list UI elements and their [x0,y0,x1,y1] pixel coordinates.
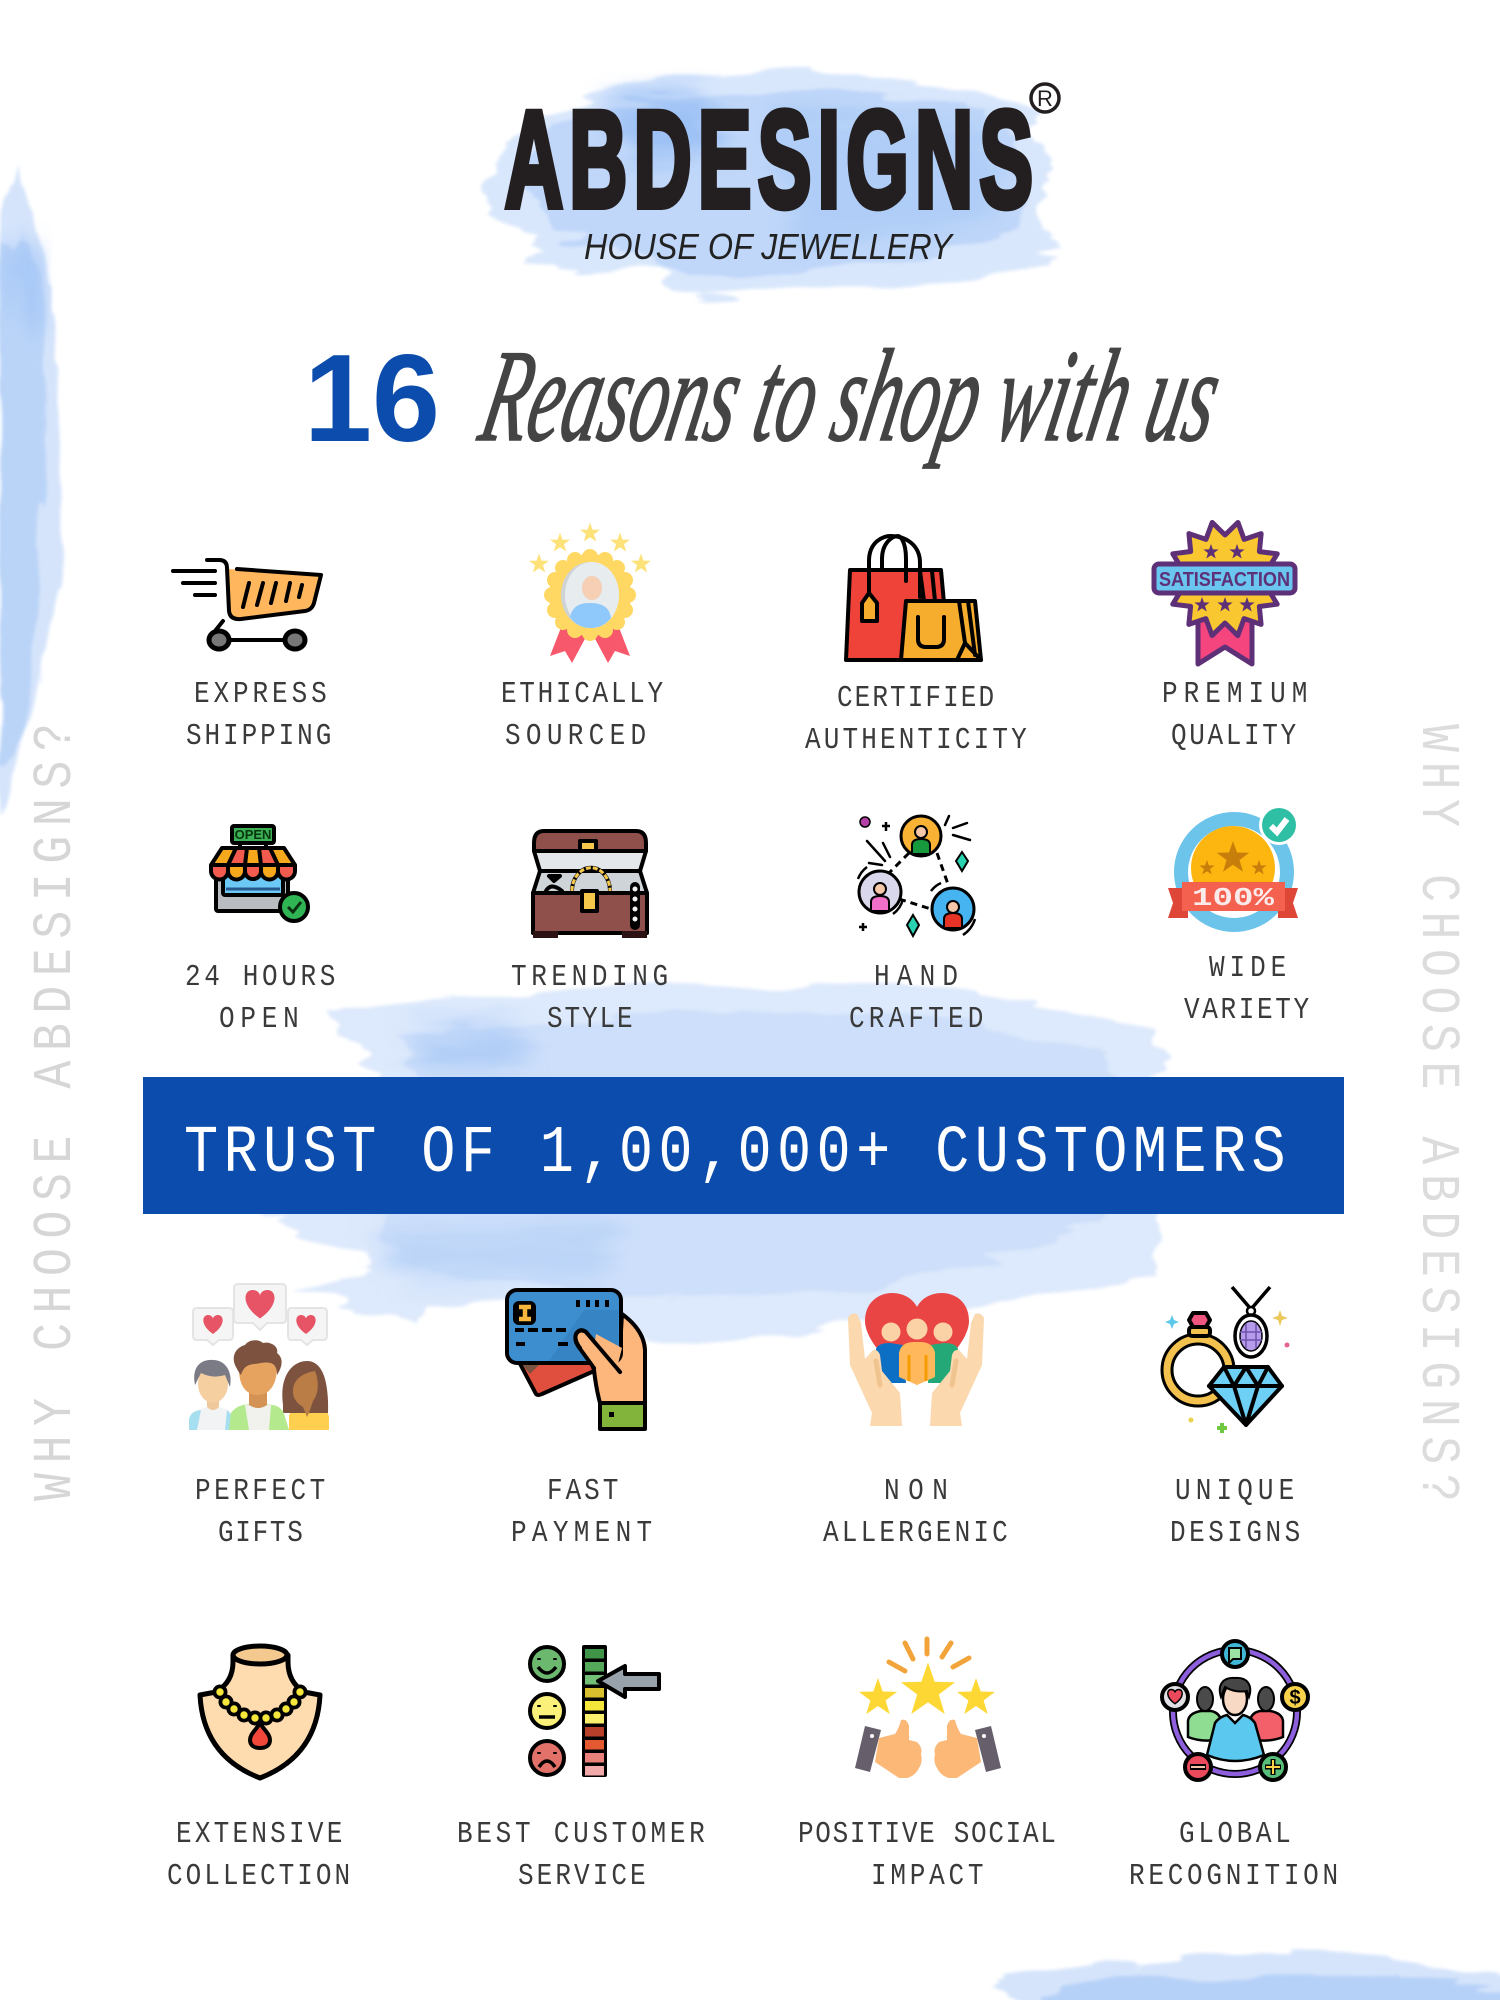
label [1129,1816,1338,1894]
label: SOURCED [505,718,646,754]
label: WIDE [1209,950,1286,986]
icon: 100 percent badge: 100% [1192,883,1275,913]
label: VARIETY [1184,992,1309,1028]
label: FAST [547,1473,618,1509]
icon: shopping bags [846,536,981,660]
banner text: TRUST OF 1,00,000+ CUSTOMERS [184,1115,1286,1191]
icon: feedback meter [530,1645,659,1777]
label [798,1816,1056,1894]
logo [505,82,1059,267]
label [186,676,331,754]
label [1170,1473,1300,1551]
label: CRAFTED [849,1001,983,1037]
icon: people with hearts [189,1284,329,1430]
icon: 100 percent badge [1168,805,1299,925]
label [185,959,335,1037]
item: global recognition [1129,1641,1338,1894]
registered mark: R [1037,86,1053,111]
item: best customer service [457,1645,705,1894]
item: positive social impact [798,1639,1056,1894]
label: DESIGNS [1170,1515,1300,1551]
icon: medal [529,522,651,663]
label: TRENDING [511,959,668,995]
side text: left: WHY CHOOSE ABDESIGNS? [26,723,87,1501]
side text: right: WHY CHOOSE ABDESIGNS? [1406,724,1467,1502]
label: PERFECT [195,1473,325,1509]
label: 24 HOURS [185,959,335,995]
label: STYLE [547,1001,633,1037]
watercolor: bottom right brush [998,1950,1500,2000]
label: GIFTS [218,1515,303,1551]
icon: hands holding family [848,1293,984,1426]
icon: ring, pendant and diamond [1165,1287,1290,1433]
label: RECOGNITION [1129,1858,1338,1894]
label [805,680,1027,758]
icon: stars and thumbs up [855,1639,1001,1778]
icon: cart [173,560,321,649]
label: QUALITY [1171,718,1296,754]
icon: satisfaction badge [1154,510,1295,664]
item: perfect gifts [189,1284,329,1551]
label: SHIPPING [186,718,331,754]
icon: jewellery chest [533,831,647,938]
label: SERVICE [518,1858,646,1894]
label: GLOBAL [1179,1816,1291,1852]
label: IMPACT [871,1858,984,1894]
icon: open shop [211,826,308,921]
icon: credit card in hand [507,1290,645,1429]
label: OPEN [219,1001,299,1037]
label: AUTHENTICITY [805,722,1027,758]
watercolor: left edge [0,165,62,815]
label [823,1473,1008,1551]
item: unique designs [1165,1287,1300,1551]
icon: necklace on bust [200,1646,320,1778]
label [1184,950,1309,1028]
label: ETHICALLY [501,676,663,712]
label [457,1816,705,1894]
item: 24 hours open [185,826,335,1037]
watercolor: banner brush [256,982,1165,1340]
heading [304,322,1233,469]
item: certified authenticity [805,536,1027,758]
label: COLLECTION [167,1858,350,1894]
item: premium quality [1154,510,1307,754]
label [511,1473,652,1551]
label: POSITIVE SOCIAL [798,1816,1056,1852]
label: UNIQUE [1175,1473,1294,1509]
logo tagline: HOUSE OF JEWELLERY [584,226,955,267]
item: fast payment [507,1290,652,1551]
item: express shipping [173,560,331,754]
icon: satisfaction badge: SATISFACTION [1159,569,1290,591]
label: PREMIUM [1162,676,1307,712]
label [849,959,983,1037]
heading number: 16 [304,330,440,468]
label [1162,676,1307,754]
icon: community ring [1162,1641,1308,1780]
logo wordmark: ABDESIGNS [505,82,1039,236]
icon: community ring: $ [1289,1687,1301,1709]
label: BEST CUSTOMER [457,1816,705,1852]
registered mark [1031,84,1059,112]
label [195,1473,325,1551]
label: EXPRESS [194,676,327,712]
item: hand crafted [849,816,983,1037]
item: non allergenic [823,1293,1008,1551]
banner [143,1077,1344,1214]
label: PAYMENT [511,1515,652,1551]
label: EXTENSIVE [176,1816,342,1852]
label: HAND [874,959,958,995]
label: CERTIFIED [837,680,994,716]
label [167,1816,350,1894]
item: wide variety [1168,805,1309,1028]
item: extensive collection [167,1646,350,1894]
label [501,676,663,754]
watercolor: logo brush [488,74,1060,300]
item: ethically sourced [501,522,663,754]
icon: open shop: OPEN [235,827,271,842]
label: ALLERGENIC [823,1515,1008,1551]
icon: people network [858,816,975,936]
label [511,959,668,1037]
item: trending style [511,831,668,1037]
label: NON [884,1473,948,1509]
